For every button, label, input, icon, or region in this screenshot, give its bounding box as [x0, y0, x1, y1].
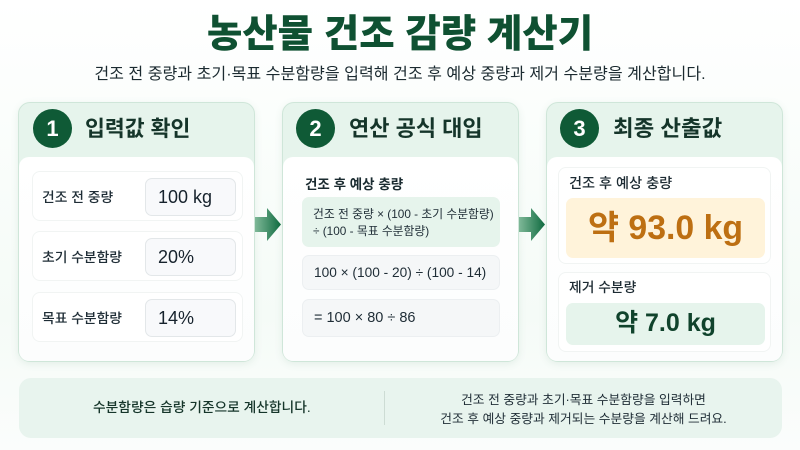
row: target moisture — [32, 292, 243, 342]
panel body: formula steps — [283, 157, 518, 361]
value: weight after drying — [566, 198, 765, 258]
row: target moisture: 목표 수분함량 — [42, 311, 122, 326]
note: moisture basis: 수분함량은 습량 기준으로 계산합니다. — [93, 400, 311, 415]
row: weight before drying — [32, 171, 243, 221]
panel: final results — [546, 102, 783, 362]
panel body: results — [547, 157, 782, 361]
step number 3 — [560, 109, 599, 148]
footer note panel — [19, 378, 782, 438]
value: water removed — [566, 303, 765, 345]
formula: general expression — [302, 197, 500, 247]
step number 3: 3 — [573, 116, 586, 141]
formula: simplified: = 100 × 80 ÷ 86 — [314, 310, 416, 326]
heading: input values: 입력값 확인 — [85, 116, 190, 141]
label: weight after drying: 건조 후 예상 충량 — [569, 176, 672, 192]
step number 2: 2 — [309, 116, 322, 141]
note: how to use — [440, 392, 727, 426]
panel: input values — [18, 102, 255, 362]
row: weight before drying: 100 kg — [158, 187, 212, 207]
formula: values substituted: 100 × (100 - 20) ÷ (100 - 14) — [314, 265, 486, 280]
formula label: 건조 후 예상 충량 — [305, 177, 403, 192]
card: water removed — [558, 272, 771, 352]
heading: final results: 최종 산출값 — [613, 116, 722, 141]
value: weight after drying: 약 93.0 kg — [588, 209, 743, 247]
note: how to use: 건조 전 중량과 초기·목표 수분함량을 입력하면 — [461, 392, 706, 407]
label: water removed: 제거 수분량 — [569, 280, 636, 295]
panel body: input rows — [19, 157, 254, 361]
step number 2 — [296, 109, 335, 148]
row: initial moisture: 초기 수분함량 — [42, 250, 122, 265]
formula: simplified — [302, 299, 500, 337]
step number 1: 1 — [46, 116, 59, 141]
formula: general expression: 건조 전 중량 × (100 - 초기 수분함량) — [313, 207, 494, 221]
panel: formula — [282, 102, 519, 362]
card: weight after drying — [558, 167, 771, 264]
formula: values substituted — [302, 255, 500, 290]
arrow: step 2 to 3 — [519, 208, 545, 241]
formula: general expression: ÷ (100 - 목표 수분함량) — [313, 224, 429, 238]
value: water removed: 약 7.0 kg — [615, 309, 716, 337]
row: target moisture: 14% — [158, 308, 194, 328]
arrow: step 1 to 2 — [255, 208, 281, 241]
row: initial moisture: 20% — [158, 247, 194, 267]
subtitle: 건조 전 중량과 초기·목표 수분함량을 입력해 건조 후 예상 중량과 제거 수분량을 계산합니다. — [94, 65, 706, 83]
row: initial moisture — [32, 231, 243, 281]
step number 1 — [33, 109, 72, 148]
heading: formula: 연산 공식 대입 — [349, 116, 483, 141]
divider — [384, 391, 385, 425]
note: how to use: 건조 후 예상 중량과 제거되는 수분량을 계산해 드려요. — [440, 410, 727, 426]
row: weight before drying: 건조 전 중량 — [42, 190, 113, 205]
title: 농산물 건조 감량 계산기 — [207, 13, 593, 56]
